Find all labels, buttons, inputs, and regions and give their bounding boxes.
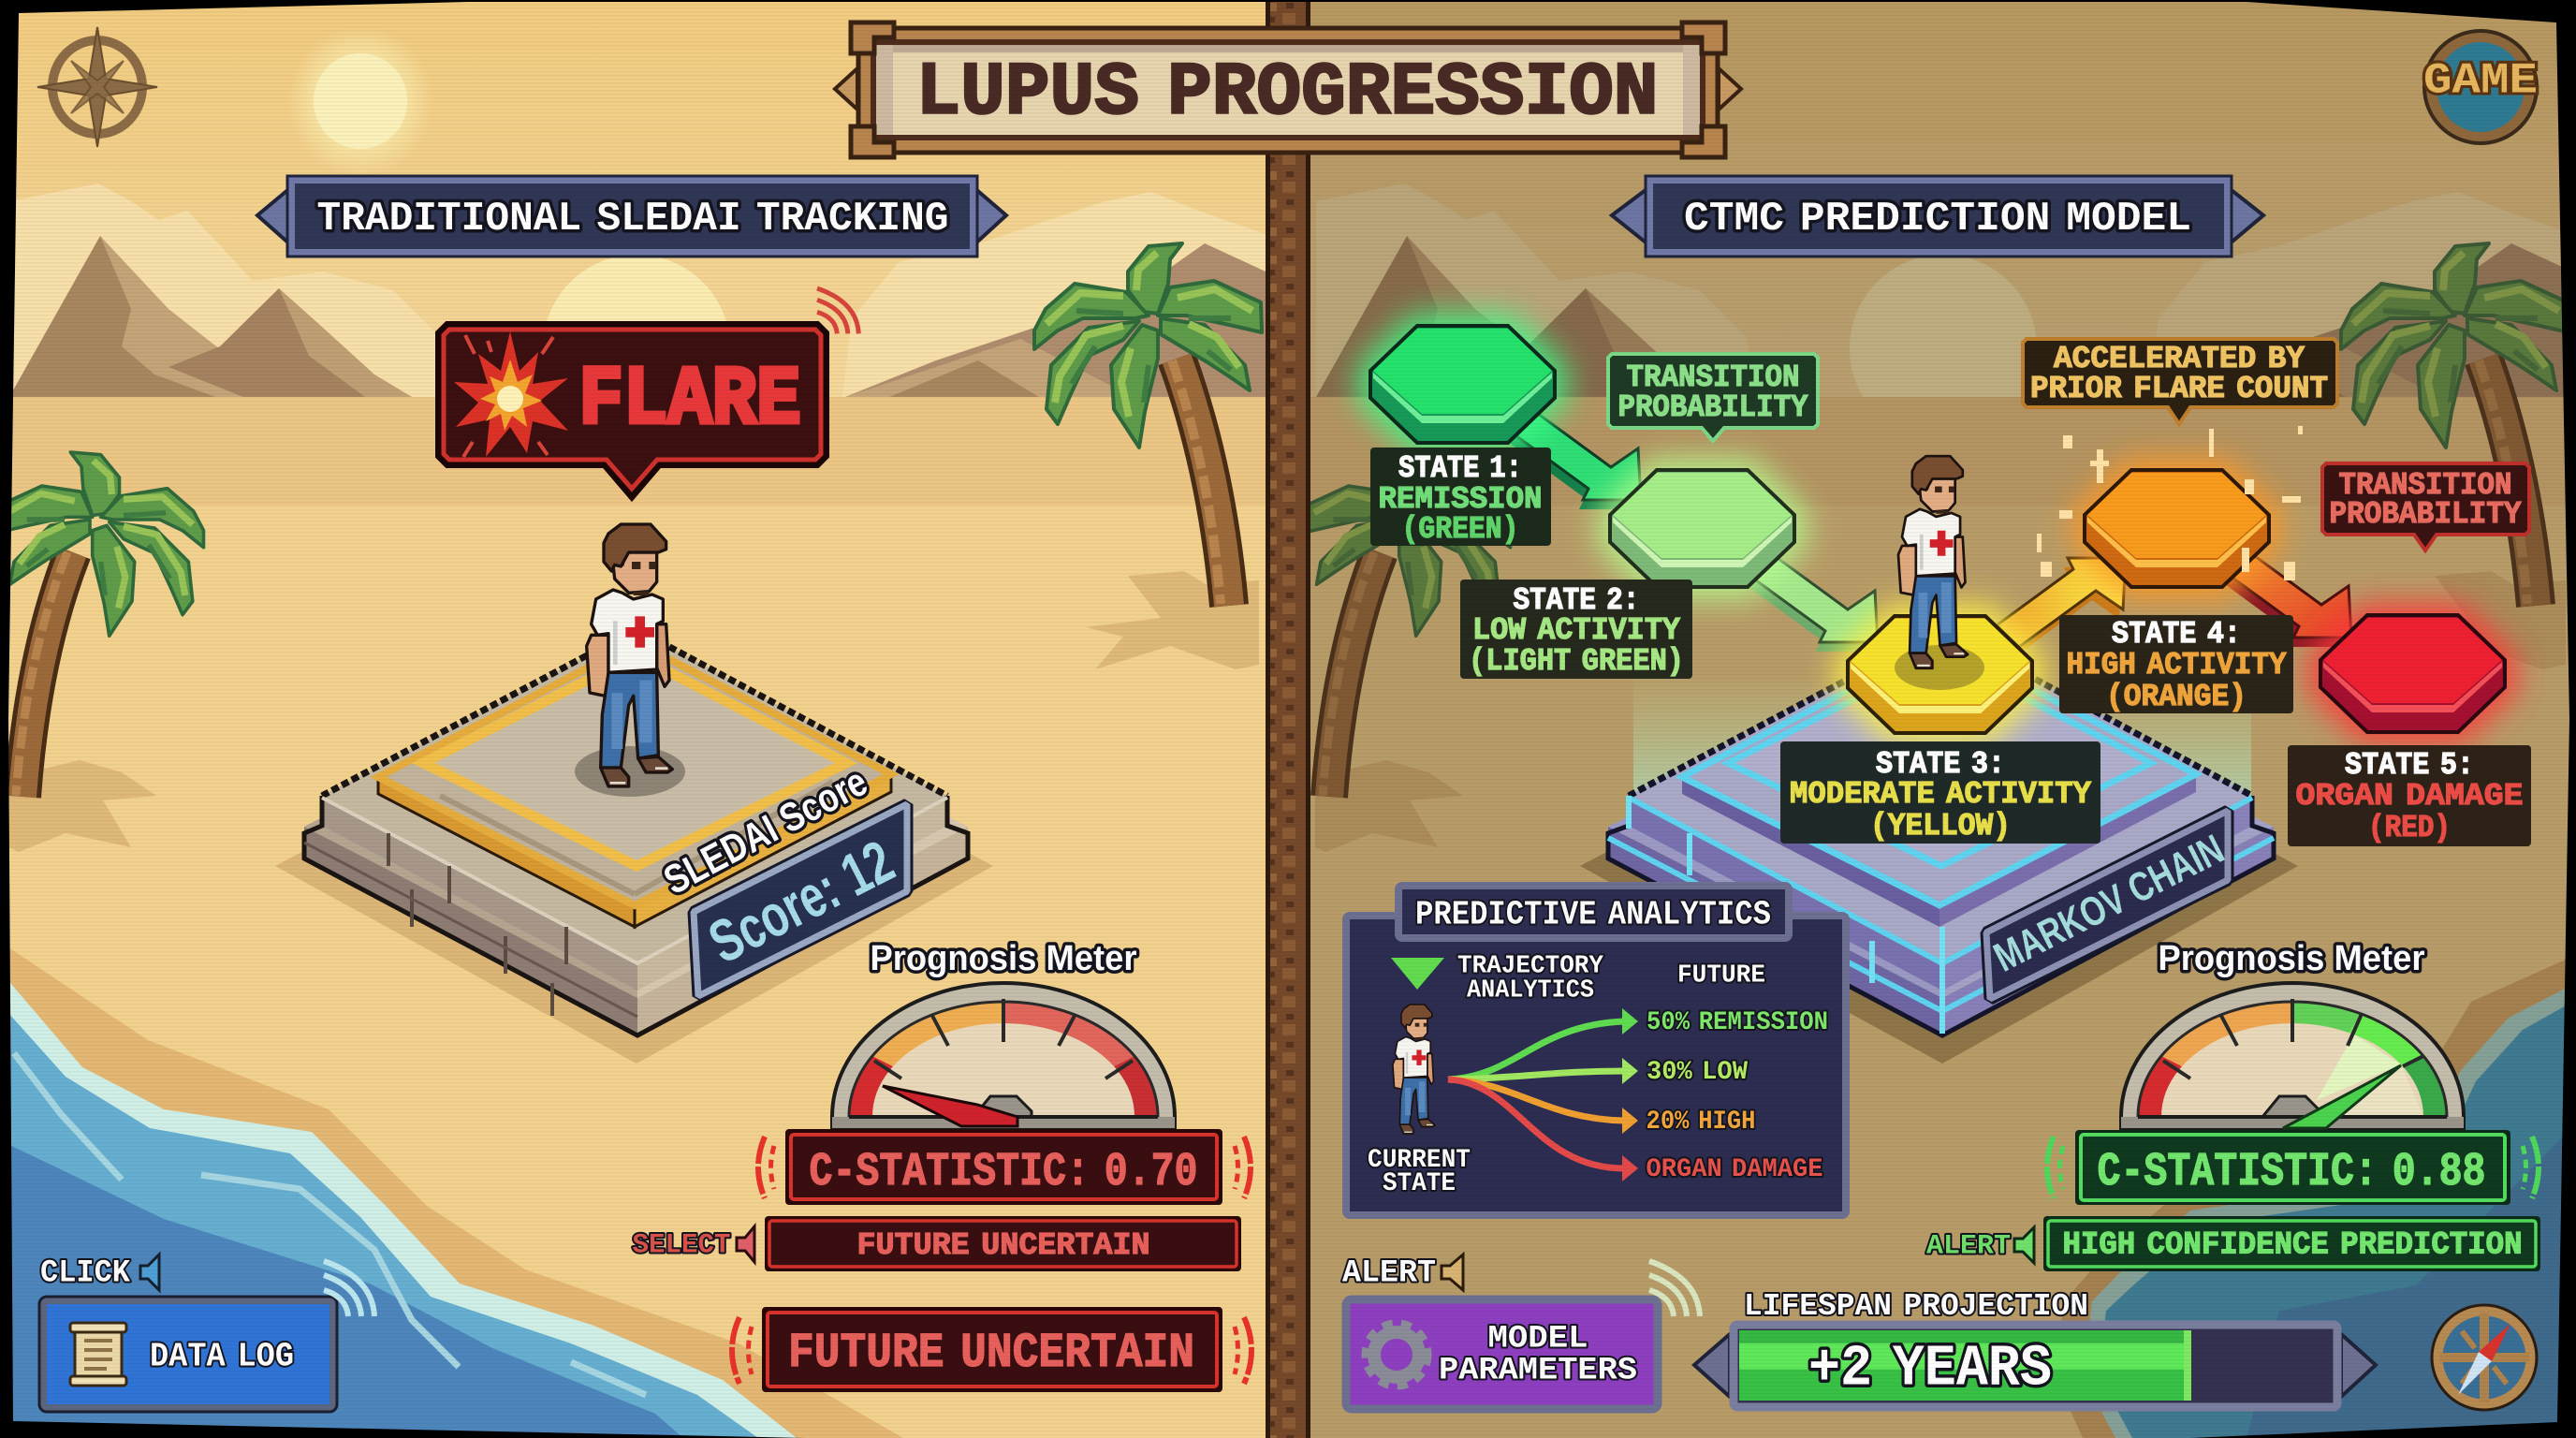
- arrow: state 1 to state 2: [1508, 411, 1641, 509]
- label: prognosis meter: Prognosis Meter: [871, 939, 1137, 978]
- readout: C-statistic 0.70: [758, 1129, 1251, 1205]
- label: state 5: (RED): [2368, 811, 2451, 845]
- gauge: left prognosis meter: [832, 939, 1175, 1128]
- icon: game badge: [2423, 31, 2538, 143]
- callout: transition probability green: TRANSITION: [1627, 360, 1799, 395]
- icon: game badge: GAME: [2423, 56, 2538, 105]
- label: state 3: (YELLOW): [1870, 809, 2011, 844]
- label: trajectory analytics: [1457, 952, 1604, 1005]
- callout: flare: [439, 288, 858, 496]
- alert: select future uncertain: SELECT: [633, 1230, 730, 1262]
- score panel: Score: 12: [698, 827, 904, 976]
- label: trajectory analytics: ANALYTICS: [1467, 976, 1594, 1005]
- chart: trajectory branches: [1448, 1008, 1638, 1181]
- title plaque: [835, 22, 1741, 157]
- icon: signal waves data log: [324, 1261, 374, 1316]
- label: state 5: [2288, 745, 2531, 846]
- character: patient on state 3: [1896, 455, 1969, 670]
- label: current state: [1368, 1146, 1471, 1198]
- platform: Markov chain: [1580, 629, 2298, 1064]
- label: 20 percent high: 20% HIGH: [1646, 1108, 1756, 1137]
- label: current state: CURRENT: [1368, 1146, 1471, 1175]
- node: state 5 organ damage: [2320, 615, 2505, 732]
- label: SLEDAI score: SLEDAI Score: [657, 759, 874, 903]
- callout: transition probability red: [2322, 463, 2529, 550]
- label: state 2: [1460, 580, 1692, 679]
- icon: explosion: [454, 331, 568, 457]
- label: state 1: (GREEN): [1402, 512, 1518, 547]
- alert: large future uncertain: FUTURE UNCERTAIN: [788, 1326, 1194, 1381]
- label: prognosis meter: Prognosis Meter: [2159, 939, 2425, 978]
- banner: CTMC prediction model: CTMC PREDICTION MODEL: [1684, 196, 2191, 242]
- label: state 2: STATE 2:: [1513, 583, 1640, 618]
- button: data log: DATA LOG: [150, 1337, 294, 1375]
- background: left beach scene: [0, 0, 1310, 1438]
- label: state 4: STATE 4:: [2112, 617, 2241, 652]
- ocean: left shoreline: [0, 942, 903, 1438]
- sun: [287, 26, 433, 176]
- center divider: [1266, 0, 1310, 1438]
- alert: high confidence prediction: HIGH CONFIDENCE PREDICTION: [2063, 1228, 2522, 1264]
- callout: accelerated by prior flare count: [2023, 339, 2337, 424]
- label: future: FUTURE: [1677, 961, 1765, 990]
- readout: C-statistic 0.88: C-STATISTIC: 0.88: [2097, 1146, 2486, 1199]
- label: state 1: STATE 1:: [1398, 451, 1522, 486]
- callout: transition probability red: TRANSITION: [2338, 468, 2512, 503]
- label: trajectory analytics: TRAJECTORY: [1457, 952, 1604, 980]
- label: state 4: [2059, 615, 2293, 714]
- gauge: right prognosis meter: [2121, 939, 2464, 1128]
- label: 50 percent remission: 50% REMISSION: [1647, 1008, 1828, 1037]
- panel: predictive analytics: [1346, 886, 1846, 1215]
- background: right beach scene: [1306, 0, 2576, 1438]
- label: lifespan projection: LIFESPAN PROJECTION: [1744, 1289, 2088, 1324]
- button: model parameters: [1346, 1299, 1658, 1409]
- arrow: state 2 to state 3: [1745, 553, 1878, 652]
- label: state 4: (ORANGE): [2106, 680, 2247, 714]
- label: state 3: STATE 3:: [1876, 747, 2005, 782]
- platform: SLEDAI stone: [275, 629, 993, 1064]
- banner: traditional SLEDAI tracking: [257, 176, 1006, 257]
- icon: scroll: [70, 1323, 126, 1386]
- progress bar: lifespan projection: +2 YEARS: [1808, 1336, 2052, 1402]
- callout: transition probability green: PROBABILITY: [1617, 390, 1808, 425]
- icon: signal waves model parameters: [1649, 1261, 1700, 1316]
- callout: transition probability green: [1608, 354, 1818, 441]
- label: state 5: STATE 5:: [2345, 748, 2474, 783]
- Markov chain panel: MARKOV CHAIN: [1986, 826, 2232, 981]
- button: model parameters: PARAMETERS: [1439, 1354, 1637, 1389]
- readout: C-statistic 0.88: [2047, 1130, 2539, 1205]
- button: data log: [39, 1297, 337, 1412]
- icon: green triangle: [1391, 958, 1444, 990]
- node: state 4 high activity: [2085, 470, 2269, 587]
- label: organ damage: ORGAN DAMAGE: [1646, 1155, 1823, 1184]
- label: state 1: REMISSION: [1378, 482, 1543, 517]
- arrow: state 3 to state 4: [1993, 558, 2126, 656]
- icon: signal waves: [817, 288, 858, 333]
- button: model parameters: MODEL: [1488, 1322, 1588, 1357]
- label: state 5: ORGAN DAMAGE: [2295, 779, 2524, 814]
- alert: high confidence prediction: ALERT: [1926, 1230, 2011, 1262]
- readout: C-statistic 0.70: C-STATISTIC: 0.70: [809, 1146, 1198, 1199]
- label: click: CLICK: [40, 1256, 131, 1292]
- banner: traditional SLEDAI tracking: TRADITIONAL SLEDAI TRACKING: [316, 196, 949, 242]
- label: state 1: [1370, 448, 1551, 547]
- banner: CTMC prediction model: [1612, 176, 2263, 257]
- icon: compass bottom right: [2432, 1305, 2537, 1410]
- alert: select future uncertain: FUTURE UNCERTAIN: [857, 1228, 1149, 1263]
- node: state 3 moderate activity: [1848, 616, 2032, 733]
- alert: large future uncertain: [732, 1307, 1251, 1392]
- icon: gear: [1366, 1324, 1427, 1386]
- label: state 2: (LIGHT GREEN): [1469, 644, 1684, 679]
- label: alert: ALERT: [1342, 1256, 1436, 1292]
- callout: accelerated by prior flare count: PRIOR FLARE COUNT: [2030, 372, 2328, 406]
- header: predictive analytics: PREDICTIVE ANALYTICS: [1415, 895, 1771, 933]
- score panel: [694, 804, 907, 996]
- Markov chain panel: [1986, 811, 2232, 999]
- ocean: right shoreline: [2055, 955, 2576, 1438]
- label: state 2: LOW ACTIVITY: [1472, 613, 1680, 648]
- label: state 4: HIGH ACTIVITY: [2067, 648, 2287, 682]
- arrow: state 4 to state 5: [2218, 549, 2351, 647]
- label: state 3: MODERATE ACTIVITY: [1790, 777, 2091, 812]
- alert: high confidence prediction: [1926, 1216, 2540, 1271]
- callout: transition probability red: PROBABILITY: [2329, 497, 2522, 532]
- node: state 2 low activity: [1610, 470, 1794, 587]
- label: state 3: [1780, 741, 2100, 844]
- label: 30 percent low: 30% LOW: [1647, 1058, 1748, 1087]
- progress bar: lifespan projection: [1694, 1289, 2376, 1407]
- sparkles: around state 4: [2037, 426, 2303, 580]
- character: current state: [1392, 1004, 1436, 1135]
- title text: LUPUS PROGRESSION: [915, 51, 1659, 137]
- header: predictive analytics: [1398, 886, 1789, 938]
- node: state 1 remission: [1370, 326, 1555, 443]
- label: current state: STATE: [1383, 1169, 1456, 1198]
- alert: select future uncertain: [633, 1216, 1241, 1271]
- icon: compass top left: [37, 27, 157, 147]
- callout: accelerated by prior flare count: ACCELERATED BY: [2054, 342, 2305, 376]
- label: flare text: FLARE: [578, 355, 801, 448]
- light column: right platform: [1633, 674, 2251, 833]
- character: patient on stone platform: [585, 522, 674, 788]
